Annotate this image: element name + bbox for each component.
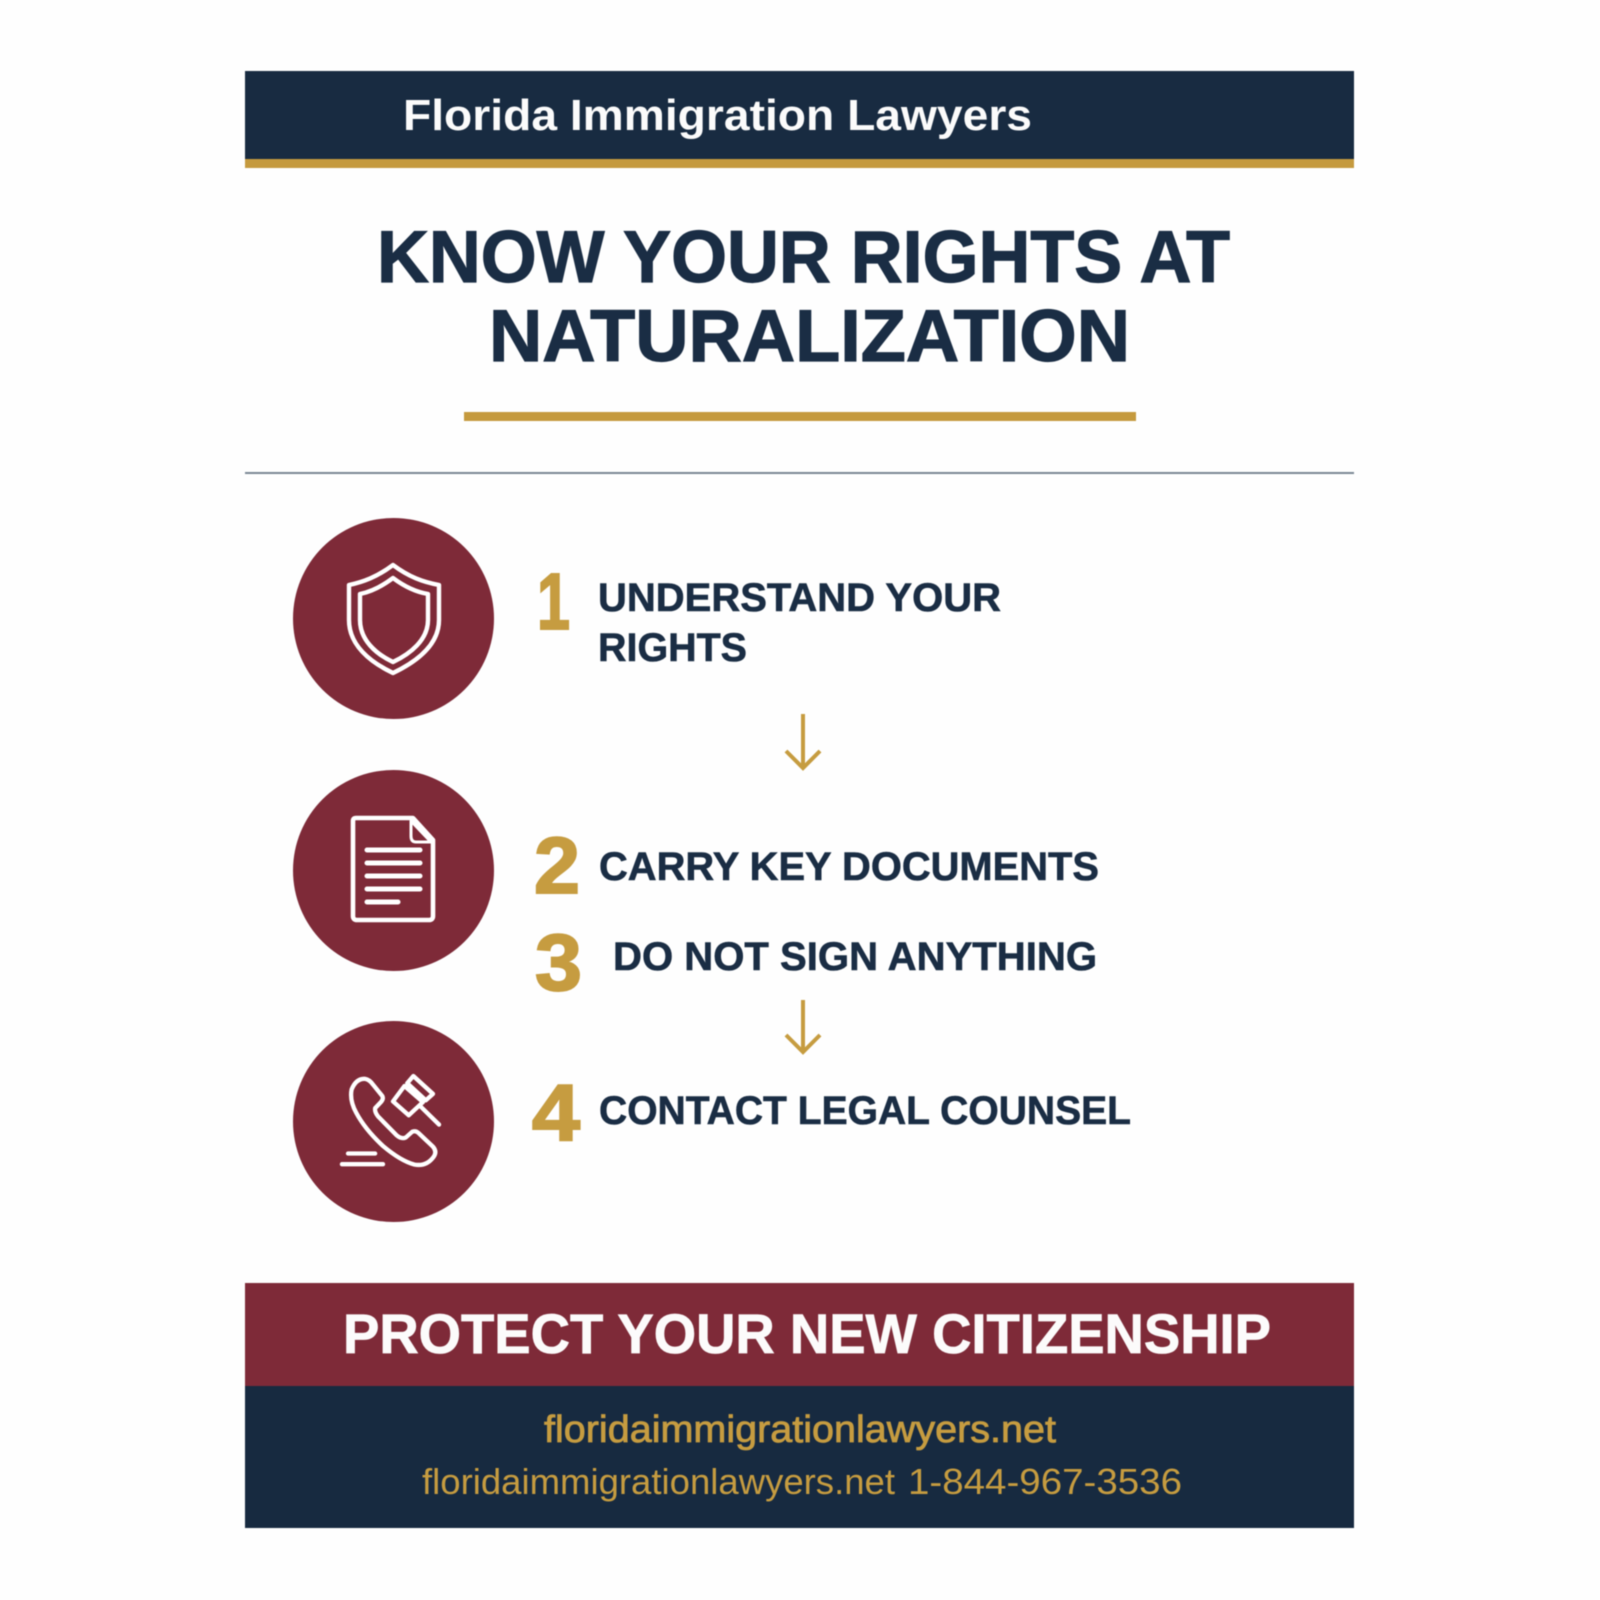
contact footer	[245, 1386, 1354, 1528]
step 4 label: CONTACT LEGAL COUNSEL	[599, 1089, 1131, 1133]
arrow down 2	[786, 1000, 820, 1052]
header firm name: Florida Immigration Lawyers	[403, 91, 1032, 140]
website: floridaimmigrationlawyers.net	[544, 1409, 1056, 1451]
step 1 label	[598, 576, 1001, 670]
call-to-action band: PROTECT YOUR NEW CITIZENSHIP	[343, 1302, 1271, 1365]
header bar	[245, 71, 1354, 168]
website and phone	[422, 1461, 1182, 1502]
title	[377, 217, 1230, 377]
title underline	[464, 412, 1136, 421]
website and phone: 1-844-967-3536	[908, 1461, 1182, 1502]
step 3 number: 3	[535, 918, 582, 1007]
website and phone: floridaimmigrationlawyers.net	[422, 1461, 895, 1502]
step 1 icon: shield	[293, 518, 494, 719]
call-to-action band	[245, 1283, 1354, 1387]
step 3 label: DO NOT SIGN ANYTHING	[613, 935, 1097, 979]
step 1 number: 1	[537, 557, 570, 646]
arrow down 1	[786, 714, 820, 768]
step 2 label: CARRY KEY DOCUMENTS	[599, 845, 1099, 889]
title: KNOW YOUR RIGHTS AT	[377, 217, 1230, 298]
step 4 icon: phone and gavel	[293, 1021, 494, 1222]
title: NATURALIZATION	[489, 296, 1130, 377]
step 2 number: 2	[534, 821, 580, 910]
step 1 label: UNDERSTAND YOUR	[598, 576, 1001, 620]
step 2 icon: document	[293, 770, 494, 971]
step 4 number: 4	[532, 1068, 581, 1157]
step 1 label: RIGHTS	[598, 626, 747, 670]
